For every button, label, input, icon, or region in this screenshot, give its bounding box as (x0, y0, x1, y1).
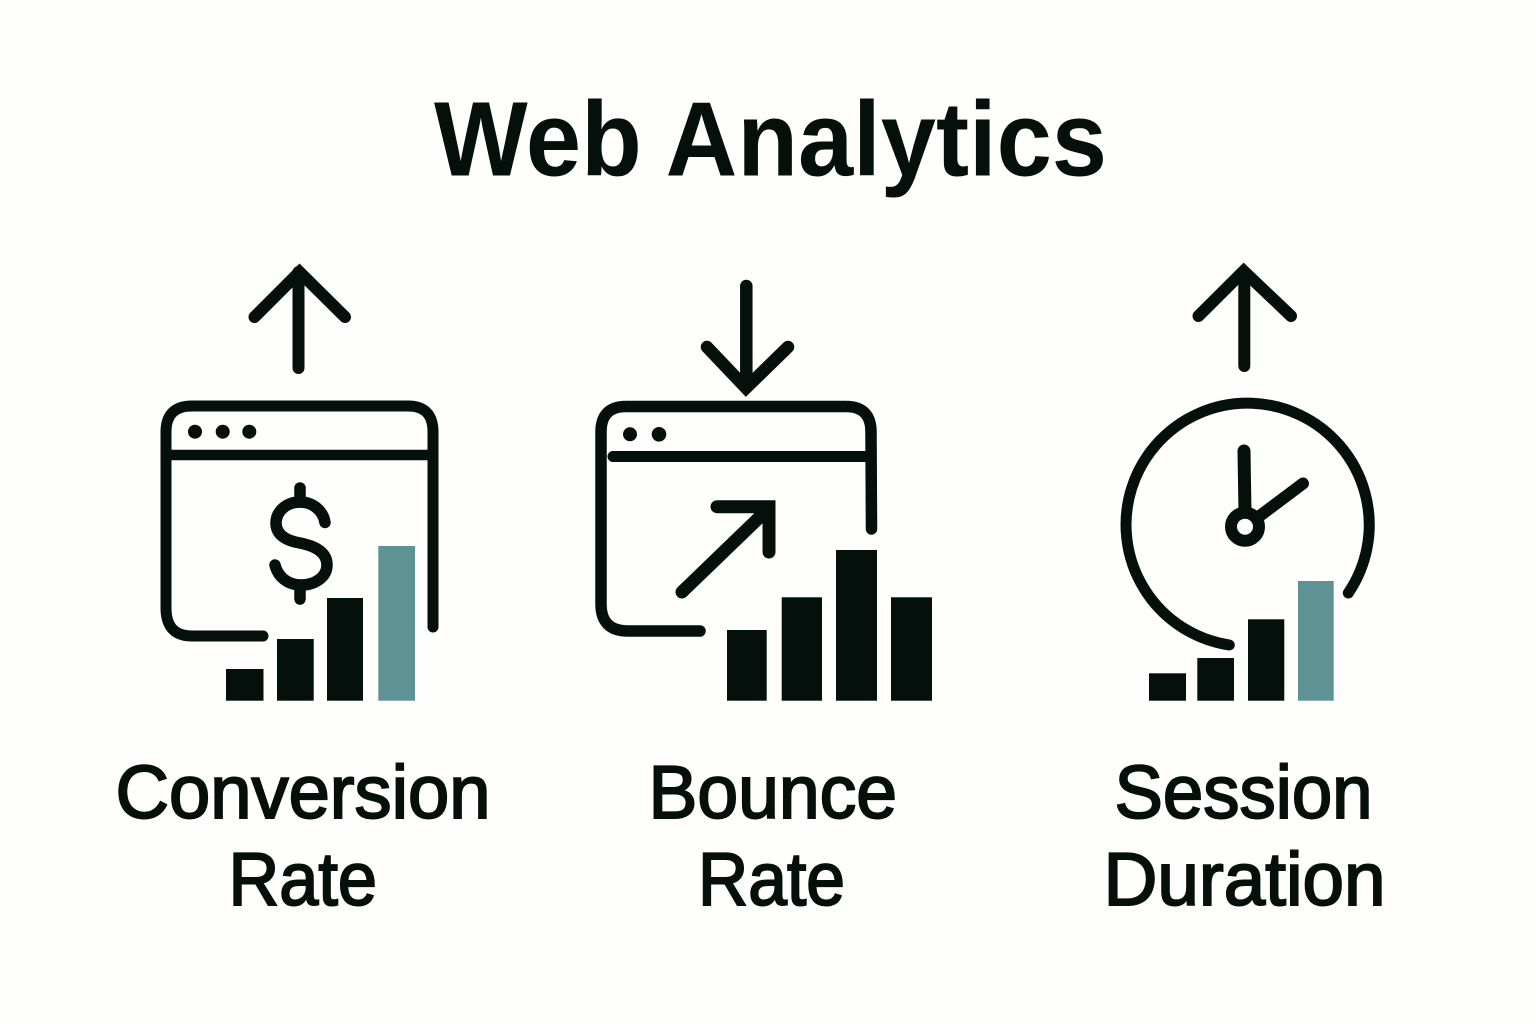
title: Web Analytics (434, 80, 1107, 198)
panel: session duration (1104, 271, 1386, 921)
label: session duration: Session (1114, 750, 1372, 834)
icon: diagonal arrow (682, 507, 769, 592)
label: session duration (1104, 750, 1386, 921)
label: conversion rate (116, 750, 490, 921)
icon: dollar sign (275, 488, 327, 599)
arrow: down (707, 286, 788, 388)
label: bounce rate: Bounce (648, 750, 897, 834)
bar chart (1149, 581, 1334, 701)
label: conversion rate: Conversion (116, 750, 490, 834)
label: bounce rate (648, 750, 897, 921)
label: session duration: Duration (1104, 837, 1386, 921)
icon: browser window (166, 406, 433, 636)
panel: bounce rate (601, 286, 932, 921)
arrow: up (254, 272, 345, 368)
icon: browser window (601, 406, 872, 631)
bar chart (727, 550, 932, 701)
label: bounce rate: Rate (698, 837, 845, 921)
icon: clock (1126, 403, 1369, 645)
label: conversion rate: Rate (228, 837, 377, 921)
bar chart (226, 546, 415, 701)
arrow: up (1198, 271, 1291, 366)
panel: conversion rate (116, 272, 490, 921)
